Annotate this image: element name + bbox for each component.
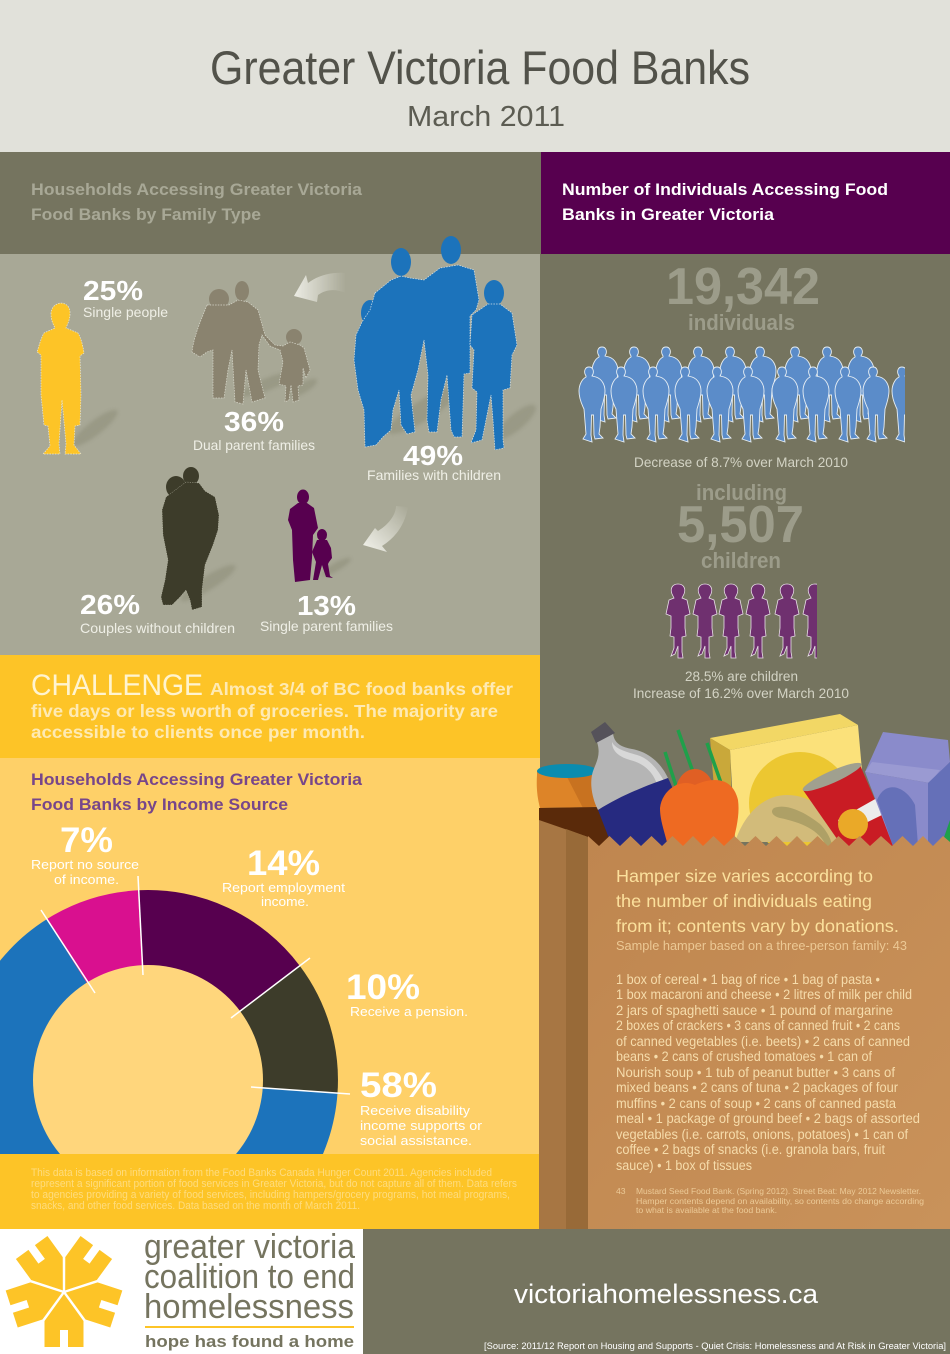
label: no income: Report no source bbox=[31, 858, 139, 872]
logo wordmark: greater victoria bbox=[144, 1228, 355, 1266]
challenge text: Almost 3/4 of BC food banks offer bbox=[210, 679, 513, 699]
milk carton bbox=[865, 732, 950, 846]
stat: couples without children bbox=[80, 589, 235, 636]
label: employment bbox=[222, 844, 346, 909]
icon: couple bbox=[161, 467, 219, 610]
heading: family type: Households Accessing Greater Victoria bbox=[31, 180, 363, 199]
icon: single person bbox=[37, 303, 84, 454]
stat: single people bbox=[83, 275, 168, 320]
label: pension: Receive a pension. bbox=[350, 1005, 468, 1019]
label: pension: 10% bbox=[346, 968, 420, 1007]
logo wordmark: coalition to end bbox=[144, 1258, 355, 1296]
hamper contents list: muffins • 2 cans of soup • 2 cans of canned pasta bbox=[616, 1096, 897, 1111]
header band bbox=[0, 0, 950, 152]
stat: children bbox=[677, 480, 804, 573]
label: pension bbox=[346, 968, 468, 1019]
illustration: groceries bbox=[537, 714, 950, 854]
stat: families with children: 49% bbox=[403, 440, 463, 471]
icon: family with children bbox=[354, 236, 517, 450]
stat: children: including bbox=[696, 480, 787, 505]
note: children share bbox=[633, 668, 849, 701]
hamper contents list: meal • 1 package of ground beef • 2 bags of assorted bbox=[616, 1111, 920, 1126]
footnote bbox=[616, 1186, 924, 1215]
heading: hamper: from it; contents vary by donations. bbox=[616, 916, 899, 936]
icon row: children bbox=[666, 584, 827, 658]
challenge text: five days or less worth of groceries. The majority are bbox=[31, 701, 498, 721]
panel: data note: represent a significant portion of food services in Greater Victoria, but do not capture all of them. Data refers bbox=[31, 1178, 517, 1190]
stat: families with children bbox=[367, 440, 501, 483]
label: disability: income supports or bbox=[360, 1119, 482, 1133]
icon: five house flower logo bbox=[6, 1236, 122, 1347]
footnote: Hamper contents depend on availability, so contents do change according bbox=[636, 1196, 924, 1206]
arrow: to single parent bbox=[363, 506, 408, 552]
hamper contents list: beans • 2 cans of crushed tomatoes • 1 can of bbox=[616, 1049, 872, 1064]
logo wordmark bbox=[144, 1228, 355, 1351]
donut chart bbox=[0, 876, 350, 1154]
hamper contents list: mixed beans • 2 cans of tuna • 2 packages of four bbox=[616, 1080, 899, 1095]
hamper contents list: Nourish soup • 1 tub of peanut butter • 3 cans of bbox=[616, 1065, 895, 1080]
panel: individuals header: Banks in Greater Victoria bbox=[562, 205, 775, 224]
source line: [Source: 2011/12 Report on Housing and Supports - Quiet Crisis: Homelessness and At Risk in Greater Victoria] bbox=[484, 1341, 946, 1351]
panel: data note: to agencies providing a variety of food services, including hampers/grocery programs, hot meal programs, bbox=[31, 1189, 510, 1201]
label: no income: 7% bbox=[60, 821, 113, 860]
bottle bbox=[591, 722, 675, 846]
challenge word: CHALLENGE bbox=[31, 669, 203, 702]
challenge text: accessible to clients once per month. bbox=[31, 722, 365, 742]
stat: couples without children: 26% bbox=[80, 589, 140, 620]
stat: families with children: Families with children bbox=[367, 467, 501, 483]
label: employment: 14% bbox=[247, 844, 320, 883]
heading: hamper: the number of individuals eating bbox=[616, 891, 872, 911]
can bbox=[800, 759, 895, 846]
panel: individuals header: Number of Individuals Accessing Food bbox=[562, 180, 888, 199]
heading: hamper: Hamper size varies according to bbox=[616, 866, 873, 886]
hamper contents list: vegetables (i.e. carrots, onions, potatoes) • 1 can of bbox=[616, 1127, 908, 1142]
heading: income source: Food Banks by Income Source bbox=[31, 795, 288, 814]
panel: logo bbox=[0, 1228, 363, 1354]
label: employment: Report employment bbox=[222, 881, 346, 895]
sample hamper note: Sample hamper based on a three-person family: 43 bbox=[616, 938, 907, 953]
carrots bbox=[660, 730, 739, 846]
stat: dual parent families: Dual parent families bbox=[193, 437, 315, 453]
logo wordmark: homelessness bbox=[144, 1288, 354, 1326]
jar bbox=[537, 764, 612, 846]
heading: hamper bbox=[616, 866, 899, 936]
icon: dual parent family bbox=[192, 281, 310, 404]
footnote: Mustard Seed Food Bank. (Spring 2012). Street Beat: May 2012 Newsletter. bbox=[636, 1186, 921, 1196]
heading: income source bbox=[31, 770, 363, 814]
heading: family type: Food Banks by Family Type bbox=[31, 205, 261, 224]
note: children share: 28.5% are children bbox=[685, 668, 798, 684]
heading: income source: Households Accessing Greater Victoria bbox=[31, 770, 363, 789]
stat: single people: 25% bbox=[83, 275, 143, 306]
stat: single people: Single people bbox=[83, 304, 168, 320]
hamper contents list: 1 box of cereal • 1 bag of rice • 1 bag of pasta • bbox=[616, 972, 880, 987]
note: children share: Increase of 16.2% over March 2010 bbox=[633, 685, 849, 701]
panel: income source bbox=[0, 758, 540, 1154]
stat: children: children bbox=[701, 548, 781, 573]
panel: data note bbox=[0, 1154, 540, 1229]
cheese box bbox=[710, 714, 865, 854]
stat: dual parent families bbox=[193, 406, 315, 453]
label: disability: social assistance. bbox=[360, 1134, 472, 1148]
hamper contents list: coffee • 2 bags of snacks (i.e. granola bars, fruit bbox=[616, 1142, 885, 1157]
hamper contents list: of canned vegetables (i.e. beets) • 2 cans of canned bbox=[616, 1034, 910, 1049]
label: disability: 58% bbox=[360, 1066, 437, 1105]
stat: single parent families: 13% bbox=[297, 590, 356, 621]
panel: challenge bbox=[0, 655, 540, 758]
challenge text bbox=[31, 679, 513, 742]
stat: individuals: individuals bbox=[688, 310, 795, 335]
icon: single parent and child bbox=[288, 490, 333, 582]
bread bbox=[735, 795, 845, 846]
stat: individuals: 19,342 bbox=[666, 258, 820, 316]
label: no income bbox=[31, 821, 139, 887]
hamper contents list: 2 boxes of crackers • 3 cans of canned fruit • 2 cans bbox=[616, 1018, 900, 1033]
panel: individuals header bbox=[541, 152, 950, 254]
label: disability bbox=[360, 1066, 482, 1148]
title: Greater Victoria Food Banks bbox=[210, 41, 750, 94]
stat: children: 5,507 bbox=[677, 496, 804, 554]
ground shadows bbox=[69, 367, 540, 606]
hamper contents list: 1 box macaroni and cheese • 2 litres of milk per child bbox=[616, 987, 912, 1002]
website url: victoriahomelessness.ca bbox=[514, 1279, 819, 1309]
panel: household family type bbox=[0, 180, 540, 655]
subtitle: March 2011 bbox=[407, 101, 565, 133]
hamper contents list bbox=[616, 972, 920, 1173]
hamper contents list: sauce) • 1 box of tissues bbox=[616, 1158, 752, 1173]
stat: couples without children: Couples without children bbox=[80, 620, 235, 636]
panel: grocery bag bbox=[539, 820, 950, 1229]
heading: family type bbox=[31, 180, 363, 224]
note: decrease: Decrease of 8.7% over March 2010 bbox=[634, 454, 848, 470]
stat: dual parent families: 36% bbox=[224, 406, 284, 437]
hamper contents list: 2 jars of spaghetti sauce • 1 pound of margarine bbox=[616, 1003, 893, 1018]
footnote: 43 bbox=[616, 1186, 626, 1196]
logo wordmark: hope has found a home bbox=[145, 1332, 354, 1351]
arrow: to dual parent bbox=[294, 273, 346, 302]
footnote: to what is available at the food bank. bbox=[636, 1205, 777, 1215]
label: no income: of income. bbox=[54, 873, 119, 887]
stat: single parent families bbox=[260, 590, 393, 634]
icon row: adults bbox=[579, 347, 918, 442]
label: disability: Receive disability bbox=[360, 1104, 471, 1118]
panel: data note: This data is based on information from the Food Banks Canada Hunger Count 2011. Agencies included bbox=[31, 1167, 492, 1179]
panel: data note: snacks, and other food services. Data based on the month of March 2011. bbox=[31, 1200, 360, 1212]
label: employment: income. bbox=[261, 895, 309, 909]
stat: single parent families: Single parent families bbox=[260, 618, 393, 634]
